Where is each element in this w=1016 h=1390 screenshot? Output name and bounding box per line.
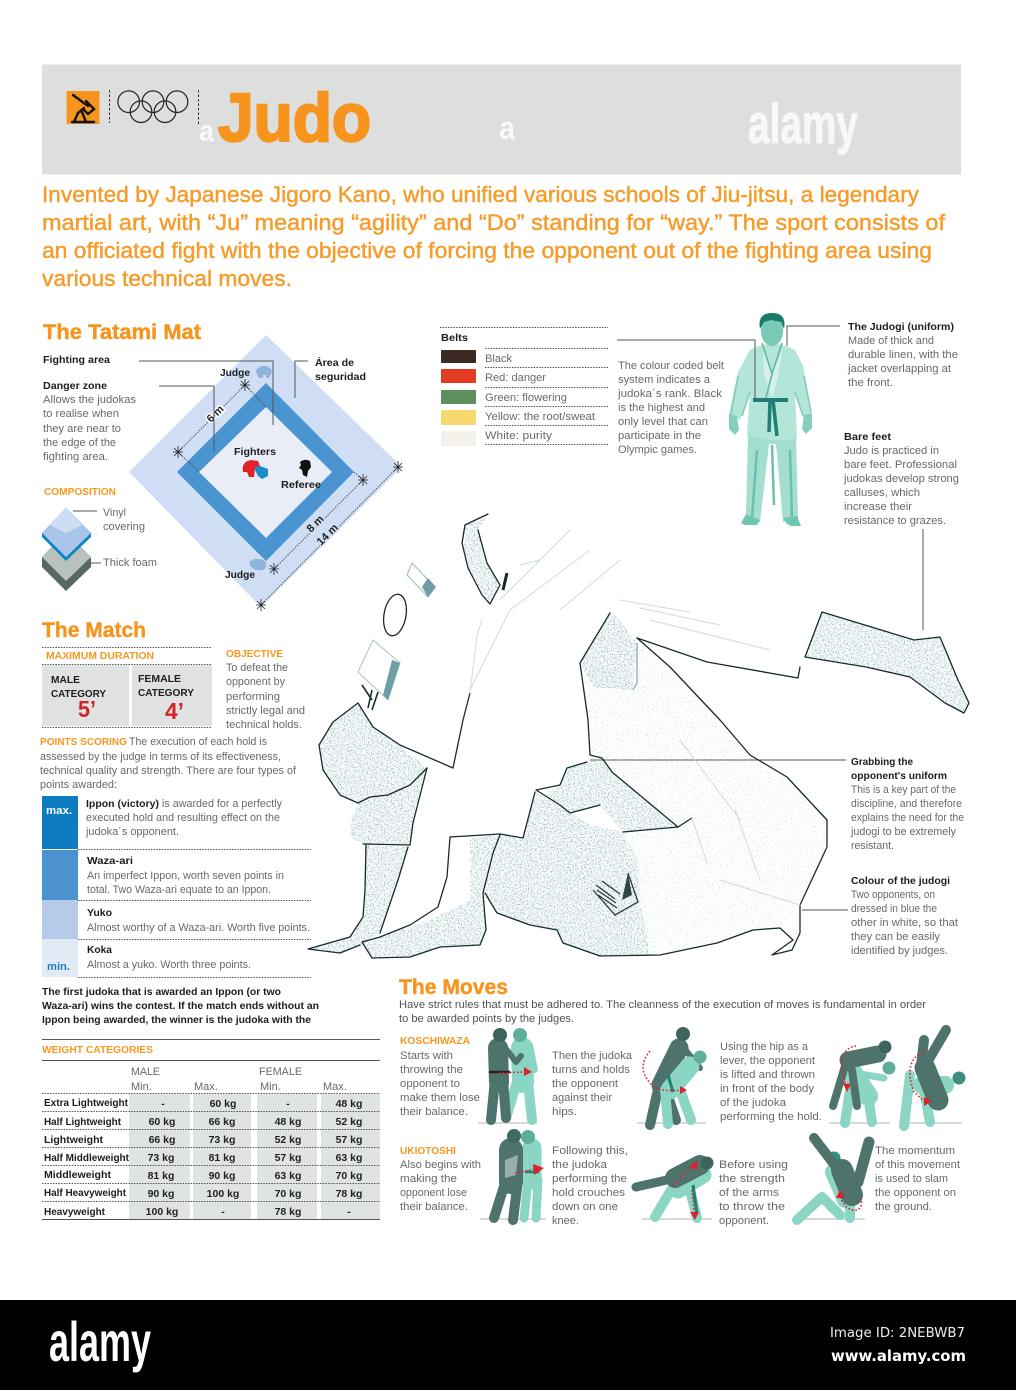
labels: dimensions (205, 403, 341, 548)
text: winner rule: The first judoka that is awarded an Ippon (or two (42, 986, 281, 998)
text: objective: performing (226, 691, 280, 703)
text: koschiwaza step 2: the opponent (552, 1078, 618, 1090)
icon: judge top (256, 366, 272, 378)
text: bare feet: bare feet. Professional (844, 459, 957, 471)
header band (42, 64, 961, 174)
text: moves intro (399, 999, 926, 1025)
heading: the tatami mat: The Tatami Mat (43, 321, 201, 344)
text: ukiotoshi step 1: their balance. (400, 1201, 468, 1213)
card: male category (42, 665, 129, 726)
text: belt system: Olympic games. (618, 444, 697, 456)
belt labels: Yellow: the root/sweat (485, 411, 595, 423)
text: koschiwaza step 2: against their (552, 1092, 612, 1104)
text: moves intro: to be awarded points by the judges. (399, 1013, 574, 1025)
outlines (308, 514, 969, 958)
table: weight categories: Heavyweight (44, 1206, 105, 1218)
icon: judo pictogram (66, 91, 100, 124)
jacket patch top (407, 563, 435, 597)
text: belt system (617, 360, 724, 456)
icon: fighters (243, 460, 268, 479)
table: weight categories: 60 kg (149, 1116, 175, 1128)
belt labels: Green: flowering (485, 392, 567, 404)
text: danger zone: the edge of the (43, 437, 116, 449)
text: koschiwaza step 1: Starts with (400, 1050, 453, 1062)
text: waza-ari: total. Two Waza-ari equate to an Ippon. (87, 884, 271, 896)
text: danger zone: fighting area. (43, 451, 108, 463)
text: points scoring (40, 736, 297, 791)
table: weight categories: 63 kg (275, 1170, 301, 1182)
table: weight categories: 48 kg (275, 1116, 301, 1128)
footer bar (0, 1300, 1016, 1390)
text: belt system: system indicates a (618, 374, 711, 386)
illustration: koschiwaza 4 (899, 1030, 966, 1126)
text: koschiwaza step 1: throwing the (400, 1064, 463, 1076)
labels: dimensions: 8 m (305, 513, 327, 535)
card: female category: FEMALE (138, 673, 181, 685)
text: koschiwaza step 3: of the judoka (720, 1097, 787, 1109)
text: objective: strictly legal and (226, 705, 305, 717)
text: ukiotoshi step 4: the ground. (875, 1201, 932, 1213)
text: koschiwaza step 3: lever, the opponent (720, 1055, 815, 1067)
texture: skin speckle (308, 514, 969, 958)
table: weight categories: Half Heavyweight (44, 1187, 126, 1199)
table: weight categories: 70 kg (275, 1188, 301, 1200)
text: grabbing the uniform: resistant. (851, 840, 894, 852)
text: grabbing the uniform (850, 756, 964, 852)
watermark (199, 92, 858, 155)
text: koschiwaza step 3: in front of the body (720, 1083, 815, 1095)
composition diagram: Thick foam (103, 557, 157, 569)
tatami diagram (129, 335, 403, 611)
table: weight categories (42, 1040, 380, 1220)
text: bare feet: Bare feet (844, 431, 892, 443)
composition diagram: Vinyl (103, 507, 126, 519)
table: weight categories: 66 kg (209, 1116, 235, 1128)
tatami diagram: Fighters (234, 446, 276, 458)
text: bare feet: Judo is practiced in (844, 445, 939, 457)
belt labels: White: purity (485, 430, 553, 442)
text: waza-ari: Waza-ari (87, 855, 133, 867)
table: weight categories: 66 kg (149, 1134, 175, 1146)
table: weight categories: 73 kg (148, 1152, 174, 1164)
panel: belts (440, 328, 724, 456)
table: weight categories: 70 kg (336, 1170, 362, 1182)
text: danger zone: they are near to (43, 423, 121, 435)
logo: alamy: alamy (49, 1310, 151, 1373)
table: weight categories: Min. (131, 1081, 152, 1093)
tatami diagram: seguridad (315, 371, 366, 383)
table: weight categories: 57 kg (336, 1134, 362, 1146)
text: ukiotoshi step 2: the judoka (552, 1159, 608, 1171)
text: koschiwaza step 1: opponent to (400, 1078, 460, 1090)
text: ukiotoshi step 1: opponent lose (400, 1187, 467, 1199)
text: belt system: is the highest and (618, 402, 705, 414)
text: ippon: Ippon (victory) (86, 798, 159, 810)
text: koschiwaza step 2: Then the judoka (552, 1050, 633, 1062)
panel: the moves (399, 976, 966, 1227)
text: ippon (85, 798, 282, 838)
text: colour of the judogi: they can be easily (851, 931, 940, 943)
text: yuko: Almost worthy of a Waza-ari. Worth five points. (87, 922, 310, 934)
intro text (42, 182, 946, 291)
faint folds (470, 530, 800, 905)
table: weight categories: 63 kg (336, 1152, 362, 1164)
text: koschiwaza step 1: make them lose (400, 1092, 480, 1104)
text: the judogi (847, 321, 958, 389)
text: ukiotoshi step 3: opponent. (719, 1215, 769, 1227)
belt labels (485, 353, 595, 442)
table: weight categories: MALE (131, 1066, 160, 1078)
table: weight categories: 81 kg (148, 1170, 174, 1182)
text: koschiwaza step 2: hips. (552, 1106, 577, 1118)
text: objective (226, 649, 305, 731)
text: ukiotoshi step 2: hold crouches (552, 1187, 626, 1199)
text: objective: technical holds. (226, 719, 302, 731)
text: koschiwaza step 3: is lifted and thrown (720, 1069, 815, 1081)
text: winner rule (42, 986, 319, 1026)
text: ukiotoshi step 1: Also begins with (400, 1159, 481, 1171)
text: objective: opponent by (226, 676, 285, 688)
text: koschiwaza step 1 (400, 1036, 480, 1118)
text: yuko (87, 907, 310, 934)
text: points scoring: technical quality and strength. There are four types of (40, 765, 297, 777)
intro text: an officiated fight with the objective of forcing the opponent out of the fighting area using (42, 238, 932, 263)
table: weight categories: 78 kg (275, 1206, 301, 1218)
labels: dimensions: 14 m (315, 522, 341, 548)
text: colour of the judogi: identified by judges. (851, 945, 948, 957)
text: colour of the judogi: Colour of the judogi (851, 875, 950, 887)
text: bare feet: judokas develop strong (843, 473, 959, 485)
text: objective: To defeat the (226, 662, 288, 674)
table: weight categories: 73 kg (209, 1134, 235, 1146)
text: koschiwaza step 1: KOSCHIWAZA (400, 1036, 470, 1047)
icon: judge bottom (249, 559, 266, 570)
text: koka (87, 944, 251, 971)
text: grabbing the uniform: Grabbing the (851, 756, 913, 768)
panel: the match (40, 619, 319, 1026)
card: female category: CATEGORY (138, 687, 194, 699)
text: ukiotoshi step 1: UKIOTOSHI (400, 1146, 456, 1157)
text: ukiotoshi step 2: knee. (552, 1215, 579, 1227)
text: koka: Almost a yuko. Worth three points. (87, 959, 251, 971)
text: ukiotoshi step 1 (400, 1146, 481, 1213)
table: weight categories: Max. (194, 1081, 218, 1093)
text: colour of the judogi: other in white, so that (851, 917, 958, 929)
tatami diagram: Judge (220, 367, 250, 379)
text: danger zone: to realise when (43, 408, 119, 420)
composition diagram: COMPOSITION (44, 487, 116, 498)
illustration: koschiwaza 3 (829, 1040, 896, 1123)
text: koschiwaza step 3: performing the hold. (720, 1111, 822, 1123)
text: belt system: The colour coded belt (618, 360, 724, 372)
table: weight categories: Extra Lightweight (44, 1097, 128, 1109)
icon: olympic rings (118, 91, 188, 122)
text: belt system: only level that can (618, 416, 708, 428)
text: grabbing the uniform: opponent's uniform (851, 770, 947, 782)
points scale: min. (47, 961, 70, 973)
illustration: standing judoka (729, 313, 812, 526)
text: ippon: judoka´s opponent. (85, 826, 179, 838)
table: weight categories: - (161, 1098, 165, 1110)
label: fighting area: Fighting area (43, 354, 110, 366)
text: koschiwaza step 2: turns and holds (552, 1064, 631, 1076)
table: weight categories: FEMALE (259, 1066, 302, 1078)
text: bare feet: resistance to grazes. (844, 515, 946, 527)
table: weight categories: 60 kg (210, 1098, 236, 1110)
table: weight categories: 57 kg (275, 1152, 301, 1164)
text: ippon: executed hold and resulting effect on the (86, 812, 280, 824)
text: danger zone (43, 380, 137, 463)
card: female category (132, 665, 212, 726)
text: waza-ari (87, 855, 284, 896)
text: danger zone: Allows the judokas (43, 394, 137, 406)
illustration: main judo throw line art (308, 514, 969, 958)
text: koschiwaza step 1: their balance. (400, 1106, 468, 1118)
text: ukiotoshi step 2: performing the (552, 1173, 627, 1185)
illustration: koschiwaza 2 (637, 1027, 706, 1125)
text: ukiotoshi step 4: The momentum (875, 1145, 955, 1157)
tatami diagram: Área de (315, 356, 354, 369)
text: ukiotoshi step 3: to throw the (719, 1201, 785, 1213)
table: weight categories: 90 kg (148, 1188, 174, 1200)
table: weight categories: - (347, 1206, 351, 1218)
image id: Image ID: 2NEBWB7 (830, 1326, 965, 1341)
labels: dimensions: 6 m (205, 403, 227, 425)
text: koka: Koka (87, 944, 112, 956)
illustration: ukiotoshi 1 (480, 1129, 546, 1220)
table: weight categories: 48 kg (336, 1098, 362, 1110)
text: grabbing the uniform: This is a key part of the (851, 784, 956, 796)
table: weight categories: 100 kg (207, 1188, 239, 1200)
points scale: max. (46, 805, 72, 817)
text: the judogi: The Judogi (uniform) (848, 321, 954, 333)
tatami diagram: Referee (281, 479, 321, 491)
heading: the moves: The Moves (399, 976, 508, 999)
jacket patch lower stripe (383, 660, 400, 700)
text: ippon: is awarded for a perfectly (162, 798, 282, 810)
table: weight categories: 78 kg (336, 1188, 362, 1200)
text: ukiotoshi step 3 (719, 1159, 788, 1227)
text: koschiwaza step 3 (720, 1041, 822, 1123)
watermark: a (499, 110, 515, 146)
intro text: martial art, with “Ju” meaning “agility” and “Do” standing for “way.” The sport consists of (42, 210, 946, 235)
table: weight categories: Lightweight (44, 1134, 104, 1146)
table: weight categories: Half Middleweight (44, 1152, 129, 1164)
heading: weight categories: WEIGHT CATEGORIES (42, 1045, 153, 1056)
jacket emblem (381, 592, 409, 638)
panel: the tatami mat (42, 321, 403, 611)
belt swatches (441, 350, 476, 446)
intro text: various technical moves. (42, 266, 292, 291)
card: female category: 4’ (165, 698, 184, 724)
text: points scoring: POINTS SCORING (40, 737, 127, 748)
text: belt system: participate in the (618, 430, 701, 442)
text: ukiotoshi step 2: down on one (552, 1201, 618, 1213)
text: the judogi: Made of thick and (848, 335, 934, 347)
text: colour of the judogi: dressed in blue the (851, 903, 937, 915)
illustration: ukiotoshi 2 (636, 1156, 714, 1220)
text: ukiotoshi step 4: of this movement (875, 1159, 960, 1171)
text: the judogi: the front. (848, 377, 893, 389)
heading: the match: The Match (42, 619, 146, 642)
text: koschiwaza step 3: Using the hip as a (720, 1041, 809, 1053)
icon: referee (299, 460, 311, 477)
text: colour of the judogi: Two opponents, on (851, 889, 935, 901)
text: ukiotoshi step 2: Following this, (552, 1145, 628, 1157)
text: objective: OBJECTIVE (226, 649, 283, 660)
text: points scoring: The execution of each hold is (129, 736, 267, 748)
text: grabbing the uniform: discipline, and therefore (851, 798, 962, 810)
text: ukiotoshi step 4 (875, 1145, 960, 1213)
table: weight categories: - (221, 1206, 225, 1218)
text: ukiotoshi step 1: making the (400, 1173, 457, 1185)
text: waza-ari: An imperfect Ippon, worth seven points in (87, 870, 284, 882)
text: danger zone: Danger zone (43, 380, 107, 392)
text: the judogi: durable linen, with the (848, 349, 958, 361)
table: weight categories: Half Lightweight (44, 1116, 121, 1128)
text: belt system: judoka´s rank. Black (617, 388, 723, 400)
card: male category: CATEGORY (51, 688, 106, 700)
belt labels: Red: danger (485, 372, 546, 384)
table: weight categories: Middleweight (44, 1169, 112, 1181)
text: the judogi: jacket overlapping at (847, 363, 951, 375)
watermark: alamy (748, 92, 858, 155)
table: weight categories: 90 kg (209, 1170, 235, 1182)
label: maximum duration: MAXIMUM DURATION (46, 651, 154, 662)
table: weight categories: Min. (260, 1081, 281, 1093)
text: ukiotoshi step 3: Before using (719, 1159, 788, 1171)
text: grabbing the uniform: judogi to be extremely (850, 826, 956, 838)
belt labels: Black (485, 353, 512, 365)
table: weight categories: Max. (323, 1081, 347, 1093)
chest badge (593, 873, 638, 915)
text: bare feet (843, 431, 959, 527)
table: weight categories: 52 kg (336, 1116, 362, 1128)
jacket patch top stripe (422, 578, 436, 597)
text: points scoring: points awarded: (40, 779, 117, 791)
tatami diagram: Judge (225, 569, 255, 581)
illustration: koschiwaza 1 (478, 1028, 537, 1123)
text: grabbing the uniform: explains the need for the (851, 812, 964, 824)
url: www.alamy.com (831, 1347, 966, 1365)
text: winner rule: Waza-ari) wins the contest. If the match ends without an (42, 1000, 319, 1012)
illustration: ukiotoshi 3 (795, 1138, 869, 1220)
table: weight categories: 100 kg (146, 1206, 178, 1218)
text: ukiotoshi step 4: the opponent on (875, 1187, 956, 1199)
text: ukiotoshi step 3: of the arms (719, 1187, 780, 1199)
composition diagram: covering (103, 521, 145, 533)
text: bare feet: increase their (844, 501, 912, 513)
text: points scoring: assessed by the judge in terms of its effectiveness, (40, 751, 281, 763)
table: weight categories: 52 kg (275, 1134, 301, 1146)
table: weight categories: 81 kg (209, 1152, 235, 1164)
panel: belts: Belts (441, 332, 468, 344)
text: ukiotoshi step 2 (552, 1145, 628, 1227)
jacket patch lower (358, 640, 400, 700)
intro text: Invented by Japanese Jigoro Kano, who unified various schools of Jiu-jitsu, a legendary (42, 182, 919, 207)
composition diagram (42, 487, 157, 591)
text: colour of the judogi (851, 875, 958, 957)
watermark: a (199, 115, 214, 148)
text: yuko: Yuko (87, 907, 112, 919)
points scale (42, 796, 311, 978)
text: bare feet: calluses, which (844, 487, 920, 499)
texture: trouser speckle (582, 638, 827, 956)
text: ukiotoshi step 4: is used to slam (875, 1173, 948, 1185)
text: winner rule: Ippon being awarded, the winner is the judoka with the (42, 1014, 311, 1026)
text: koschiwaza step 2 (552, 1050, 633, 1118)
text: moves intro: Have strict rules that must be adhered to. The cleanness of the execution of moves is fundamental in order (399, 999, 926, 1011)
card: male category: MALE (51, 674, 80, 686)
title: Judo (218, 80, 371, 156)
text: ukiotoshi step 3: the strength (719, 1173, 785, 1185)
table: weight categories: - (286, 1098, 290, 1110)
card: male category: 5’ (78, 696, 96, 722)
